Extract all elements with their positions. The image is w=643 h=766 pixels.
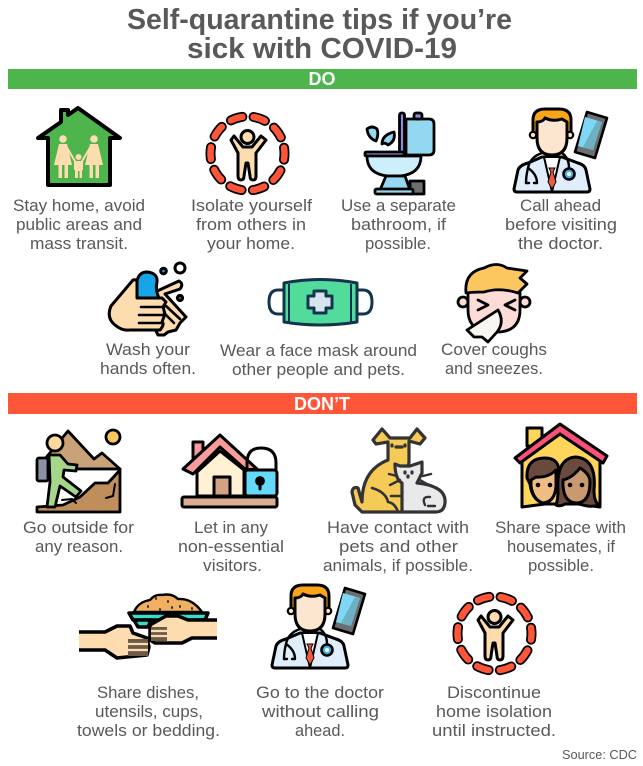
text: share space	[495, 518, 626, 575]
text: separate bathroom: Use a separate	[341, 196, 456, 215]
source note: Source: CDC	[562, 747, 637, 762]
text: go outside: Go outside for	[23, 518, 134, 537]
text: wash hands: Wash your	[106, 340, 190, 359]
icon: hiker on mountain	[37, 430, 120, 512]
text: discontinue isolation: until instructed.	[432, 721, 556, 740]
text: let in visitors: Let in any	[194, 518, 268, 537]
text: cover coughs: Cover coughs	[441, 340, 547, 359]
icon: doctor with phone, second	[272, 585, 365, 668]
text: cover coughs	[441, 340, 547, 378]
text: go to the doctor	[256, 683, 384, 740]
heading: don't banner	[8, 393, 637, 414]
text: let in visitors: visitors.	[203, 556, 262, 575]
icon: sneezing face	[458, 264, 530, 342]
text: contact with pets: pets and other	[339, 537, 458, 556]
text: stay home: Stay home, avoid	[13, 196, 145, 215]
title: sick with COVID-19	[187, 33, 457, 65]
text: share dishes: Share dishes,	[97, 683, 199, 702]
heading: do banner	[8, 69, 637, 89]
icon: two people in a house	[515, 424, 607, 507]
text: call ahead: before visiting	[505, 215, 617, 234]
text: contact with pets: animals, if possible.	[323, 556, 473, 575]
heading: don't banner: DON’T	[294, 394, 350, 414]
text: share space: possible.	[528, 556, 594, 575]
text: let in visitors	[178, 518, 284, 575]
title	[127, 4, 512, 65]
text: share space: Share space with	[495, 518, 626, 537]
text: call ahead	[505, 196, 617, 253]
text: call ahead: the doctor.	[518, 234, 603, 253]
text: wear a mask: Wear a face mask around	[220, 341, 417, 360]
text: go to the doctor: without calling	[261, 702, 379, 721]
icon: house with family	[38, 108, 120, 185]
text: wash hands	[100, 340, 196, 378]
text: go to the doctor: ahead.	[295, 721, 345, 740]
text: wear a mask: other people and pets.	[232, 360, 405, 379]
icon: isolation ring, second	[452, 591, 537, 676]
heading: do banner: DO	[308, 69, 336, 89]
icon: face mask	[269, 280, 372, 325]
text: stay home	[13, 196, 145, 253]
text: wear a mask	[220, 341, 417, 379]
text: stay home: public areas and	[16, 215, 142, 234]
text: discontinue isolation	[432, 683, 556, 740]
text: discontinue isolation: Discontinue	[447, 683, 541, 702]
text: share space: housemates, if	[507, 537, 615, 556]
text: call ahead: Call ahead	[520, 196, 601, 215]
title: Self-quarantine tips if you’re	[127, 4, 512, 36]
text: wash hands: hands often.	[100, 359, 196, 378]
icon: toilet	[365, 113, 434, 194]
icon: hands sharing a dish	[79, 594, 217, 658]
text: stay home: mass transit.	[30, 234, 128, 253]
text: cover coughs: and sneezes.	[445, 359, 543, 378]
text: separate bathroom: bathroom, if	[351, 215, 446, 234]
icon: isolation ring	[205, 111, 290, 196]
text: isolate yourself: from others in	[196, 215, 306, 234]
text: go outside	[23, 518, 134, 556]
text: separate bathroom	[341, 196, 456, 253]
text: contact with pets: Have contact with	[327, 518, 469, 537]
text: isolate yourself: your home.	[207, 234, 295, 253]
icon: doctor with phone	[514, 109, 607, 192]
text: contact with pets	[323, 518, 473, 575]
text: separate bathroom: possible.	[365, 234, 431, 253]
icon: dog and cat	[352, 429, 445, 512]
text: share dishes: utensils, cups,	[95, 702, 203, 721]
text: share dishes: towels or bedding.	[77, 721, 220, 740]
icon: washing hands	[109, 263, 186, 335]
text: discontinue isolation: home isolation	[436, 702, 552, 721]
text: go outside: any reason.	[35, 537, 123, 556]
text: share dishes	[77, 683, 220, 740]
text: go to the doctor: Go to the doctor	[256, 683, 384, 702]
text: let in visitors: non-essential	[178, 537, 284, 556]
text: isolate yourself: Isolate yourself	[191, 196, 312, 215]
icon: house with padlock	[182, 435, 277, 507]
text: isolate yourself	[191, 196, 312, 253]
